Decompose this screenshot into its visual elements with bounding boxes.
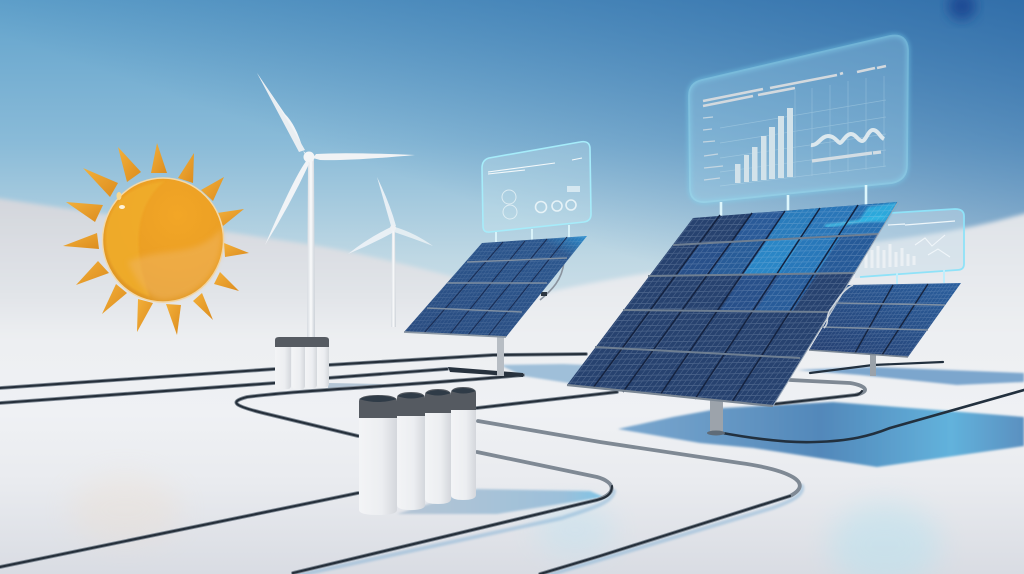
dashboard grid — [720, 76, 886, 186]
shadow of small battery — [328, 383, 385, 390]
cable outer casing — [0, 354, 865, 574]
shadow of main panel — [618, 402, 1024, 467]
small battery pack — [275, 337, 329, 389]
cable dark core — [0, 354, 862, 574]
dashboard axis labels — [703, 117, 723, 180]
dashboard stalks — [721, 185, 866, 216]
shadow of right panel — [797, 367, 1024, 385]
panel cyan light band — [825, 216, 884, 226]
panel surface — [567, 202, 898, 406]
reflective floor — [0, 345, 1024, 574]
power cables — [0, 354, 1024, 574]
battery cell 3 — [425, 389, 451, 504]
main solar panel — [567, 202, 898, 436]
panel base — [448, 367, 523, 377]
panel mast — [710, 398, 723, 433]
panel column gaps — [593, 205, 858, 402]
floor shadows — [328, 364, 1024, 514]
dashboard wave chart — [811, 130, 884, 145]
large wind turbine — [257, 73, 415, 337]
battery cell 2 — [397, 392, 425, 510]
dashboard heading marks — [703, 66, 886, 106]
large holographic dashboard — [689, 36, 908, 216]
small wind turbine — [348, 177, 433, 327]
sun rays — [63, 143, 249, 335]
battery cell 4 — [451, 387, 476, 500]
sun — [63, 143, 249, 335]
right floor cable — [717, 390, 1024, 442]
panel row gaps — [595, 234, 878, 358]
panel cable — [540, 262, 564, 300]
panel cell lines — [567, 202, 898, 406]
sun sphere — [102, 178, 224, 302]
sky background — [0, 0, 1024, 360]
battery cell 1 — [359, 395, 397, 515]
cable blue reflections — [295, 486, 802, 574]
back right holographic panel — [855, 209, 964, 284]
panel side cable — [824, 285, 853, 328]
panel mast — [497, 335, 504, 376]
dashboard glass and glow — [689, 36, 908, 202]
right panel cable — [810, 362, 943, 373]
dashboard bar chart — [735, 108, 793, 183]
highlighted cells — [676, 202, 898, 312]
middle holographic panel — [482, 142, 591, 243]
shadow of large battery — [397, 489, 604, 514]
panel surface — [404, 236, 587, 337]
large battery pack — [359, 387, 476, 515]
dashboard legend marks — [812, 152, 881, 161]
back right solar panel — [809, 283, 961, 376]
shadow of middle panel — [500, 364, 612, 384]
distant white hills — [0, 197, 1024, 365]
middle solar panel — [404, 236, 587, 377]
